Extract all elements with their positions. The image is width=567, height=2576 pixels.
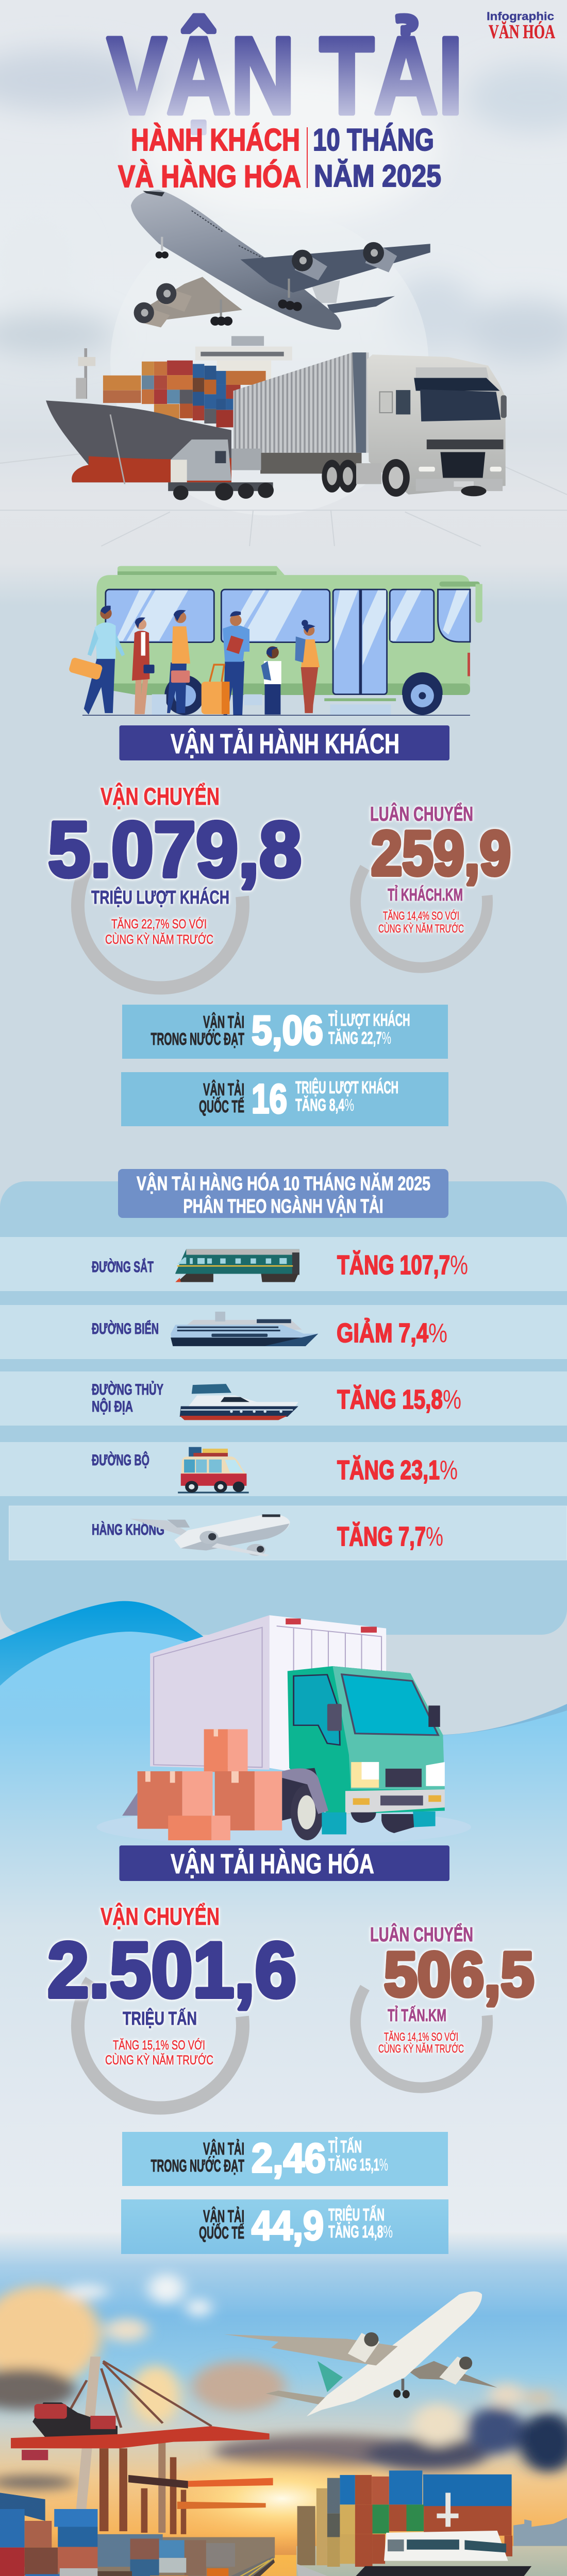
stat number: 5.079,8 [48,806,302,893]
truck windshield [420,389,501,421]
containers [103,361,266,427]
ground lines [0,453,567,546]
stat: vận chuyển hành khách [48,783,302,988]
hero illustration [0,0,567,605]
info bar: vận tải quốc tế (hàng hóa) [121,2199,448,2254]
ramp [122,1792,138,1816]
truck wheels [322,459,487,497]
ship hull red bottom [72,456,231,482]
panel heading: PHÂN THEO NGÀNH VẬN TẢI [184,1195,383,1217]
icon: airplane [130,1514,290,1556]
ship hull side [296,2564,369,2576]
info bar: vận tải trong nước (khách): TỈ LƯỢT KHÁCH [328,1010,410,1029]
far wing [240,244,430,293]
tailplane [266,2391,329,2405]
info bar: vận tải trong nước (hàng hóa): TỈ TẤN [328,2137,362,2156]
stat: luân chuyển hàng hóa [356,1923,534,2088]
photo cargo ship [296,2470,531,2576]
info bar: vận tải trong nước (khách) [122,1005,448,1059]
passenger 4 [202,611,249,715]
port yard [0,2537,275,2576]
passenger 1 [69,606,125,715]
subtitle: HÀNH KHÁCH [131,123,300,157]
info bar: vận tải trong nước (hàng hóa): TĂNG 15,1% [328,2155,388,2174]
stat note: CÙNG KỲ NĂM TRƯỚC [105,2053,213,2067]
bus steps [152,694,396,715]
passenger 6 [295,620,320,713]
info bar: vận tải trong nước (hàng hóa) [122,2132,448,2186]
info bar: vận tải quốc tế (khách): 16 [252,1076,287,1122]
ship bridge [195,336,292,381]
ring [356,1988,488,2088]
stat note [105,2038,213,2067]
headlights [351,1762,445,1788]
truck roof fairing [416,367,489,380]
bumper [345,1789,445,1814]
info bar: vận tải quốc tế (khách) [121,1072,448,1126]
heading: Vận tải hành khách [120,725,449,760]
row: đường bộ: ĐƯỜNG BỘ [92,1451,149,1469]
tailplane [327,296,395,313]
info bar: vận tải trong nước (hàng hóa): TRONG NƯỚC ĐẠT [151,2156,244,2175]
stat note: TĂNG 14,1% SO VỚI [384,2030,458,2043]
ground ellipse [96,1809,471,1845]
small truck [168,439,274,500]
ship mast [76,348,95,399]
row: đường sắt: ĐƯỜNG SẮT [92,1258,154,1276]
wheels [282,1768,436,1840]
subtitle: VÀ HÀNG HÓA [118,159,301,194]
rear mirror box [428,1705,440,1727]
info bar: vận tải quốc tế (hàng hóa): 44,9 [252,2202,324,2248]
row: đường thủy nội địa: TĂNG 15,8% [337,1385,461,1415]
row: đường biển [0,1305,567,1359]
ring [78,860,243,988]
distant skyline [513,2518,567,2546]
stat: vận chuyển hàng hóa [47,1903,296,2108]
row: đường bộ: TĂNG 23,1% [337,1455,458,1485]
row: đường bộ [0,1442,567,1496]
sun glow [145,2448,420,2549]
ground line [82,715,470,716]
far wing [409,2361,497,2387]
subtitle [118,123,441,194]
icon: van [178,1447,249,1494]
heading: Vận tải hàng hóa truck illustration [96,1615,471,1845]
cranes [11,2357,273,2534]
subtitle: NĂM 2025 [314,159,441,193]
stat note: CÙNG KỲ NĂM TRƯỚC [378,2042,464,2055]
stat unit: TỈ KHÁCH.KM [388,885,463,904]
icon: yacht [180,1384,298,1420]
stat note: TĂNG 22,7% SO VỚI [111,917,207,931]
row: hàng không: HÀNG KHÔNG [92,1521,164,1538]
stat number: 259,9 [371,818,511,888]
background waves and sky [0,1601,567,1768]
stat note [105,917,213,947]
passengers [69,606,320,715]
tail fin [311,280,340,303]
cockpit and windows [143,191,266,260]
ring [78,1980,243,2108]
info bar: vận tải trong nước (khách): TĂNG 22,7% [328,1028,391,1047]
stat unit: TỈ TẤN.KM [388,2006,446,2025]
ship superstructure [384,2493,508,2561]
container trailer [233,352,369,453]
info bar: vận tải quốc tế (khách): TĂNG 8,4% [295,1095,354,1114]
truck visor [414,378,499,391]
passenger 2 [132,617,155,714]
row: đường thủy nội địa [0,1371,567,1426]
stat note: CÙNG KỲ NĂM TRƯỚC [378,922,464,935]
near engines [134,283,192,327]
info bar: vận tải quốc tế (khách): VẬN TẢI [203,1080,244,1099]
bus windows [106,589,470,694]
blue wave band [0,1601,217,1696]
ship containers [297,2470,512,2567]
icon: cruise ship [171,1312,318,1346]
fuselage [131,190,341,330]
stat: luân chuyển hành khách [356,802,511,968]
fuselage [307,2292,482,2416]
bus wheels [164,672,443,715]
heading: Vận tải hành khách: VẬN TẢI HÀNH KHÁCH [171,728,399,759]
bus body [96,566,482,695]
near wing [224,2334,398,2365]
clouds [0,2274,567,2489]
panel: vận tải theo ngành [0,1169,567,1635]
info bar: vận tải trong nước (khách): VẬN TẢI [203,1012,244,1031]
info bar: vận tải quốc tế (khách): QUỐC TẾ [199,1096,244,1116]
anchor chain [110,414,125,484]
cab front [332,1666,445,1789]
truck cab [367,354,506,495]
info bar: vận tải trong nước (khách): TRONG NƯỚC ĐẠT [151,1029,244,1048]
logo: Infographic Văn Hóa: Infographic [487,10,554,23]
row: hàng không [9,1506,567,1560]
info bar: vận tải quốc tế (hàng hóa): VẬN TẢI [203,2207,244,2226]
row: hàng không: TĂNG 7,7% [337,1522,443,1552]
tail fin [318,2361,343,2392]
stat unit: TRIỆU TẤN [123,2007,197,2029]
near wing [145,277,242,322]
landing gear [393,2379,410,2398]
row: đường biển: GIẢM 7,4% [337,1318,447,1348]
bottom photo: port at sunset [0,2232,567,2576]
background: section base [0,567,567,1700]
cab door window [294,1675,340,1745]
panel background [0,1181,567,1635]
ring [356,868,488,968]
cardboard boxes [138,1729,282,1840]
info bar: vận tải trong nước (hàng hóa): 2,46 [252,2135,326,2181]
illustration: bus with passengers [69,566,482,716]
mirror [327,1704,342,1731]
panel heading [118,1169,448,1218]
stat number: 506,5 [384,1939,534,2009]
logo: Infographic Văn Hóa [487,10,555,43]
stat label: LUÂN CHUYỂN [370,1923,473,1946]
passenger 5 [261,646,281,715]
cargo box side [150,1615,270,1770]
grille [386,1769,422,1787]
water [97,2546,567,2576]
info bar: vận tải quốc tế (hàng hóa): TĂNG 14,8% [328,2222,393,2241]
stat note [378,909,464,935]
cab [288,1666,445,1814]
icon: train [175,1249,299,1282]
cab windshield [342,1674,438,1735]
far engines [292,242,397,280]
hero haze clouds [0,49,567,362]
tail lights [286,1618,377,1633]
stat unit: TRIỆU LƯỢT KHÁCH [91,886,229,908]
right wave band [398,1704,567,1768]
sky [0,2232,567,2567]
cargo box back [270,1615,386,1771]
info bar: vận tải trong nước (hàng hóa): VẬN TẢI [203,2139,244,2158]
stat label: LUÂN CHUYỂN [370,802,473,825]
row: đường thủy nội địa: ĐƯỜNG THỦY [92,1381,163,1398]
row: đường biển: ĐƯỜNG BIỂN [92,1320,159,1337]
truck side windows [380,390,507,418]
landing gear [156,237,302,326]
sky gradient [0,1632,567,2267]
semi truck [233,352,507,497]
box outline [154,1626,381,1768]
photo airplane [224,2292,497,2416]
row: đường sắt: TĂNG 107,7% [337,1250,468,1280]
subtitle: 10 THÁNG [313,123,434,157]
row: đường thủy nội địa: NỘI ĐỊA [92,1398,133,1415]
main title: VẬN TẢI [107,14,463,137]
stacked containers left [0,2493,235,2576]
pale sun disc [110,209,428,515]
stat label: VẬN CHUYỂN [101,783,220,810]
stat label: VẬN CHUYỂN [101,1903,220,1930]
info bar: vận tải trong nước (khách): 5,06 [252,1007,323,1053]
stat note: CÙNG KỲ NĂM TRƯỚC [105,932,213,947]
info bar: vận tải quốc tế (hàng hóa): TRIỆU TẤN [328,2205,385,2224]
ship hull bow [325,2566,531,2576]
ship hull [46,400,231,482]
engines [348,2332,473,2385]
passenger 3 [167,610,190,713]
stat note [378,2030,464,2055]
stat note: TĂNG 15,1% SO VỚI [113,2038,205,2053]
row: đường sắt [0,1237,567,1291]
truck grille [416,439,503,491]
port vehicles [0,2568,228,2576]
panel heading: VẬN TẢI HÀNG HÓA 10 THÁNG NĂM 2025 [137,1172,430,1195]
stat note: TĂNG 14,4% SO VỚI [383,909,459,922]
stat number: 2.501,6 [47,1926,296,2014]
cargo ship [46,336,292,484]
info bar: vận tải quốc tế (hàng hóa): QUỐC TẾ [199,2223,244,2242]
info bar: vận tải quốc tế (khách): TRIỆU LƯỢT KHÁCH [295,1078,398,1097]
hero airplane [131,190,430,330]
heading: Vận tải hàng hóa: VẬN TẢI HÀNG HÓA [171,1848,374,1879]
